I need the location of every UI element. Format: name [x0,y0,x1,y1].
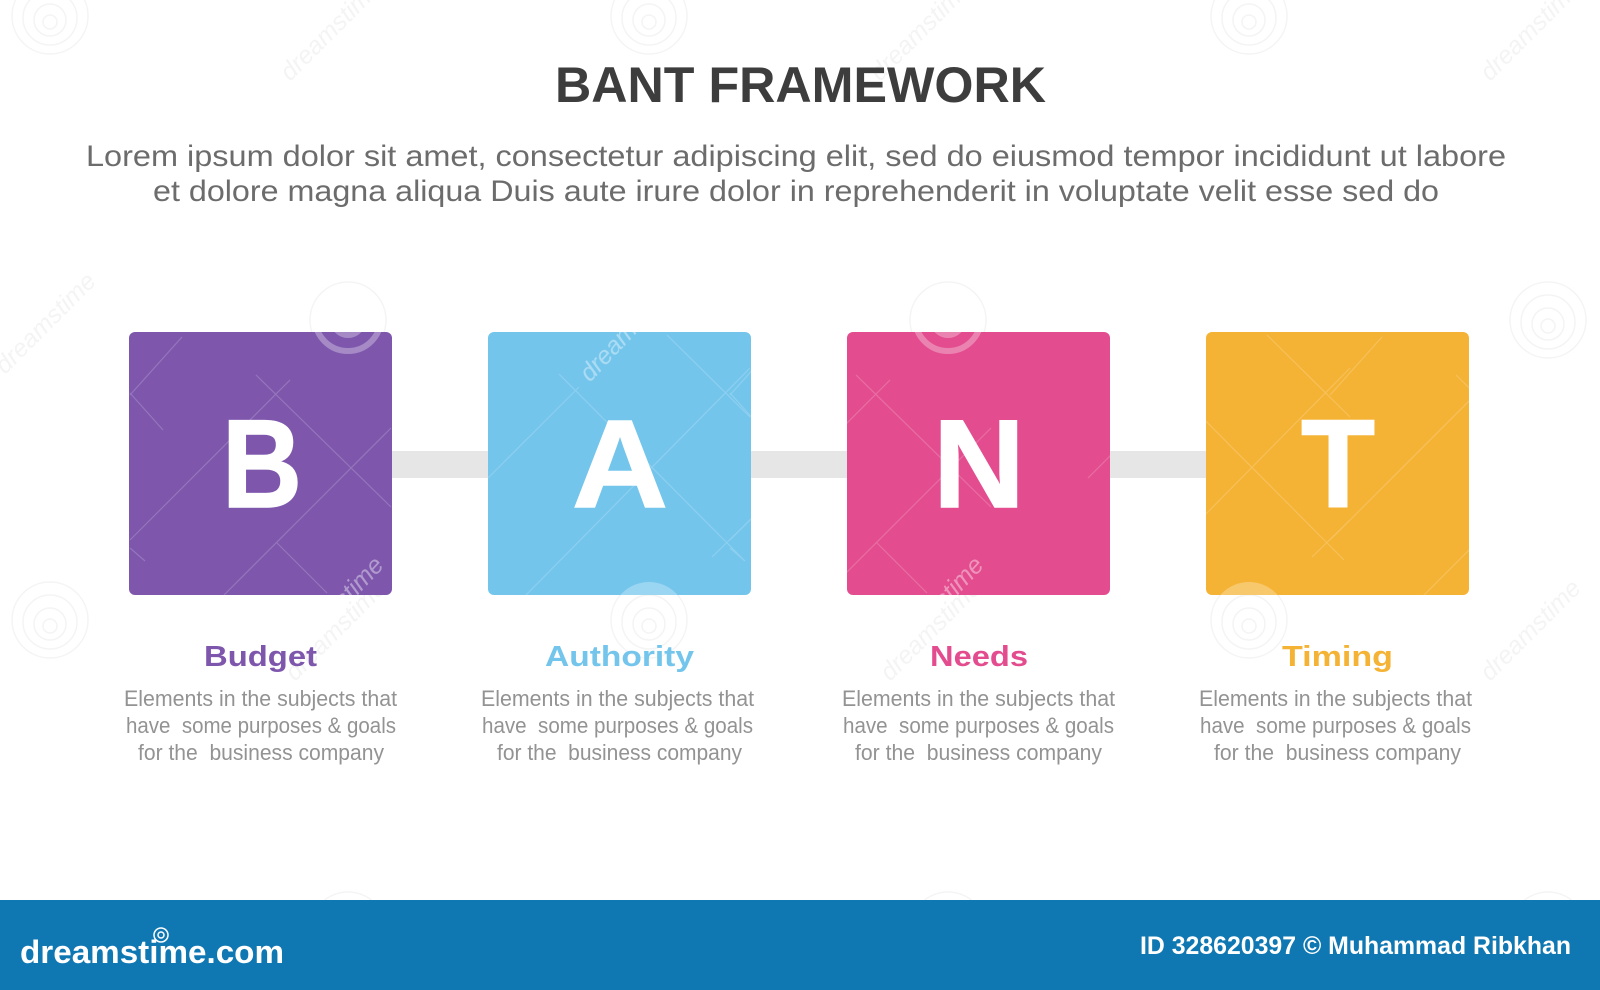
watermark pattern behind content: dreamstime [1474,574,1587,686]
subtitle text: et dolore magna aliqua Duis aute irure dolor in reprehenderit in voluptate velit esse sed do [153,175,1439,208]
column: Timing: Elements in the subjects that [1199,686,1472,711]
watermark pattern behind content: dreamstime [279,574,392,686]
connector bars between squares [392,451,1206,478]
footer logo text: dreamstime.com [20,934,284,970]
column: Budget: Budget [204,641,317,673]
column: Needs: have some purposes & goals [843,713,1114,738]
watermark overlay on squares: dreamstime [574,272,683,387]
panel: A square [488,332,751,595]
subtitle text [86,140,1506,208]
column: Needs: Needs [930,641,1028,673]
column: Timing: Timing [1282,641,1393,673]
column: Needs [842,641,1115,765]
letter A: A [572,395,668,534]
panel: B square [129,332,392,595]
title: BANT FRAMEWORK [555,57,1046,113]
subtitle text: Lorem ipsum dolor sit amet, consectetur adipiscing elit, sed do eiusmod tempor incididunt ut labore [86,140,1506,173]
column: Needs: Elements in the subjects that [842,686,1115,711]
column: Budget: for the business company [138,740,384,765]
column: Budget: Elements in the subjects that [124,686,397,711]
column: Authority: Elements in the subjects that [481,686,754,711]
letter T: T [1301,395,1375,534]
column: Timing: have some purposes & goals [1200,713,1471,738]
letter N: N [933,395,1025,534]
column: Budget: have some purposes & goals [126,713,396,738]
watermark overlay on squares: mstime [914,551,989,629]
column: Timing: for the business company [1214,740,1461,765]
footer credit text: ID 328620397 © Muhammad Ribkhan [1140,932,1571,960]
column: Authority: for the business company [497,740,742,765]
letter B: B [222,395,302,534]
column: Authority [481,641,754,765]
watermark overlay on squares: mstime [314,551,389,629]
icon: logo spiral [154,928,168,942]
column: Authority: have some purposes & goals [482,713,753,738]
panel: T square [1206,332,1469,595]
column: Needs: for the business company [855,740,1102,765]
footer bar [0,900,1600,990]
watermark overlay on squares [130,332,1469,595]
column: Budget [124,641,397,765]
panel: N square [847,332,1110,595]
watermark pattern behind content: dreamstime [874,574,987,686]
column: Timing [1199,641,1472,765]
column: Authority: Authority [545,641,694,673]
